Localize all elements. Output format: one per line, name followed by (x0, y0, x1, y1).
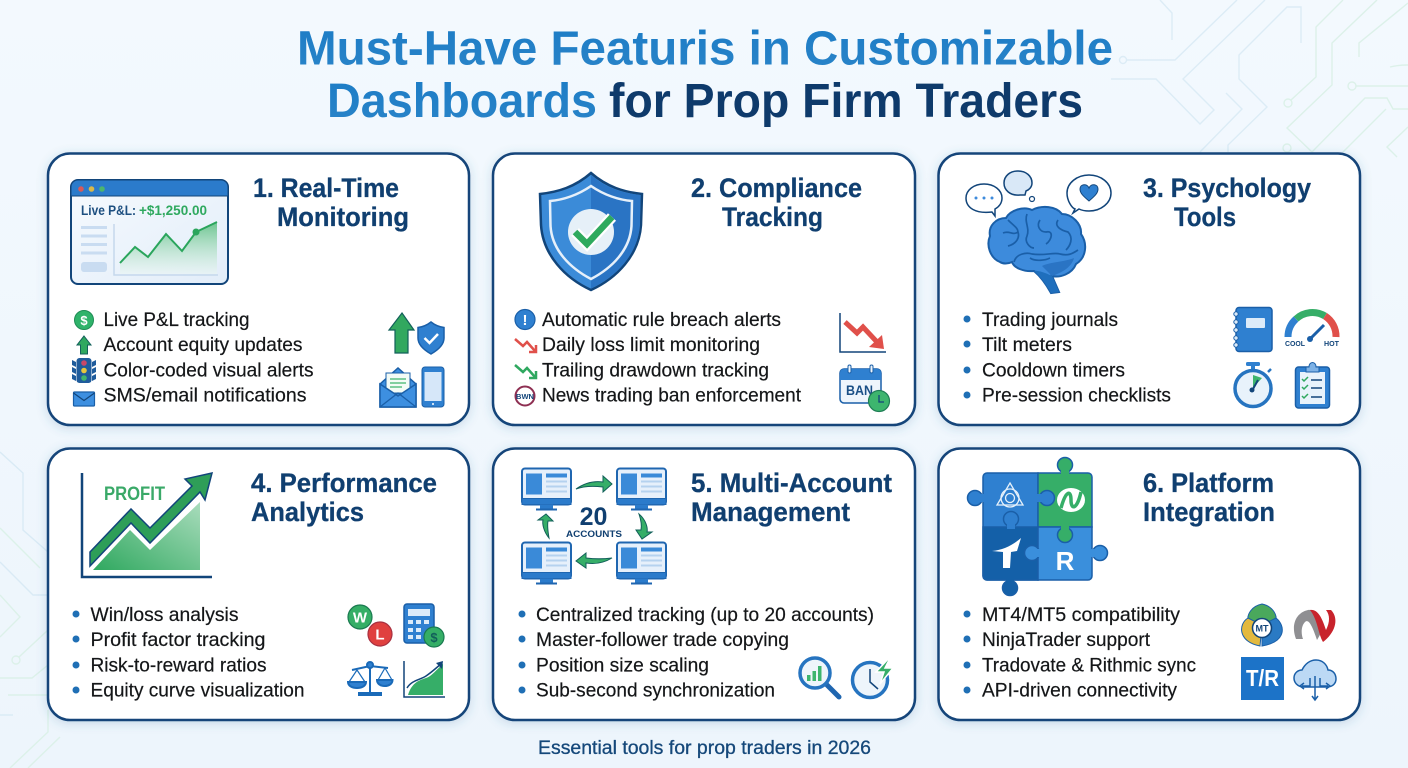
heading: performance analytics (251, 468, 437, 527)
icon: T/R badge (1241, 657, 1284, 700)
list: platform integrations: NinjaTrader support (982, 629, 1151, 651)
title: Must-Have Featuris in Customizable (297, 22, 1113, 76)
heading: psychology tools: Tools (1174, 202, 1236, 232)
icon: tilt meter: HOT (1324, 341, 1340, 348)
icon: balance scales (348, 662, 392, 694)
list: platform integrations: Tradovate & Rithmic sync (982, 654, 1196, 676)
icon: API cloud (1294, 660, 1336, 700)
icon: MetaTrader logo: MT (1256, 624, 1269, 634)
icon: ban calendar: BAN (846, 383, 873, 398)
circuit pattern bottom left (0, 452, 60, 768)
heading: platform integration (1143, 468, 1275, 527)
icon: mobile phone (422, 367, 444, 407)
icon: NinjaTrader logo (1294, 610, 1335, 642)
heading: compliance tracking (691, 173, 862, 232)
heading: performance analytics: 4. Performance (251, 468, 437, 498)
list: account management features: Centralized tracking (up to 20 accounts) (536, 604, 874, 626)
heading: psychology tools: 3. Psychology (1143, 173, 1311, 203)
icon: T/R badge: T/R (1246, 665, 1279, 691)
diagram: four synced monitors: 20 (580, 503, 607, 531)
icon: magnifier with bars (800, 658, 839, 697)
diagram: four synced monitors (522, 468, 666, 584)
list: compliance features: Automatic rule breach alerts (542, 309, 781, 331)
icon: news ban badge: BWN (516, 392, 534, 401)
list: platform integrations (964, 604, 1196, 702)
chart: profit growth: PROFIT (104, 483, 165, 505)
list: compliance features: Daily loss limit monitoring (542, 334, 760, 356)
heading: multi-account management: 5. Multi-Account (691, 468, 892, 498)
icon: alert circle (515, 310, 535, 330)
title (297, 22, 1113, 128)
list: monitoring features: SMS/email notifications (104, 384, 307, 406)
icon: brain with speech bubbles (966, 171, 1111, 293)
heading: real-time monitoring: Monitoring (277, 202, 409, 232)
icon: ban calendar (840, 365, 890, 412)
list: psychology tools: Pre-session checklists (982, 384, 1171, 406)
heading: platform integration: Integration (1143, 497, 1275, 527)
heading: performance analytics: Analytics (251, 497, 364, 527)
title: for Prop Firm Traders (609, 75, 1083, 128)
icon: red loss arrow (515, 339, 536, 352)
list: account management features: Master-follower trade copying (536, 629, 789, 651)
list: monitoring features: Color-coded visual alerts (104, 360, 314, 382)
icon: live P&L dashboard window (71, 180, 228, 284)
icon: win/loss badges: L (375, 626, 385, 644)
list: psychology tools: Cooldown timers (982, 360, 1125, 382)
panel: psychology tools (938, 154, 1360, 425)
heading: real-time monitoring (253, 173, 409, 232)
icon: equity curve (404, 661, 445, 697)
list: monitoring features: Live P&L tracking (104, 309, 250, 331)
icon: trading journal (1234, 308, 1272, 352)
icon: win/loss badges (348, 605, 392, 646)
icon: dollar coin (74, 310, 94, 330)
heading: real-time monitoring: 1. Real-Time (253, 173, 399, 203)
list: account management features: Position size scaling (536, 654, 709, 676)
list: compliance features: News trading ban enforcement (542, 384, 802, 406)
panel: compliance tracking (493, 154, 915, 425)
list: monitoring features: Account equity updates (104, 334, 303, 356)
icon: falling chart (840, 313, 886, 352)
panel: multi-account management (493, 448, 915, 720)
list: performance metrics: Risk-to-reward ratios (90, 654, 267, 676)
list: performance metrics (72, 604, 304, 702)
list: platform integrations: MT4/MT5 compatibility (982, 604, 1180, 626)
title: Dashboards (327, 75, 597, 128)
circuit pattern top right (1111, 0, 1408, 157)
icon: small envelope (74, 392, 94, 406)
icon: stopwatch (1235, 362, 1271, 406)
icon: dollar coin: $ (80, 313, 88, 328)
icon: win/loss badges: W (353, 610, 368, 626)
icon: platform puzzle (968, 458, 1108, 596)
diagram: four synced monitors: ACCOUNTS (566, 529, 622, 540)
icon: clock with lightning (852, 656, 893, 698)
list: account management features: Sub-second synchronization (536, 680, 775, 702)
icon: MetaTrader logo (1242, 604, 1282, 646)
panel: platform integration (938, 448, 1360, 720)
list: performance metrics: Profit factor tracking (90, 629, 266, 651)
chart: profit growth (82, 473, 212, 577)
icon: calculator with dollar (404, 604, 444, 647)
icon: live P&L dashboard window: +$1,250.00 (139, 203, 207, 218)
icon: tilt meter (1285, 312, 1340, 348)
heading: platform integration: 6. Platform (1143, 468, 1274, 498)
icon: tilt meter: COOL (1285, 341, 1306, 348)
icon: news ban badge (516, 386, 534, 406)
icon: live P&L dashboard window: Live P&L: (81, 203, 136, 218)
heading: multi-account management (691, 468, 892, 527)
icon: small up arrow (77, 336, 91, 354)
list: psychology tools: Tilt meters (982, 334, 1072, 356)
icon: alert circle: ! (522, 312, 528, 329)
list: performance metrics: Equity curve visualization (90, 680, 304, 702)
icon: shield with check (540, 173, 642, 290)
panel: real-time monitoring (48, 154, 469, 425)
list: compliance features: Trailing drawdown tracking (542, 360, 769, 382)
icon: traffic light (72, 358, 96, 383)
heading: multi-account management: Management (691, 497, 850, 527)
list: account management features (518, 604, 874, 702)
list: compliance features (542, 309, 802, 406)
icon: calculator with dollar: $ (430, 630, 438, 645)
panel: performance analytics (48, 448, 469, 720)
list: monitoring features (104, 309, 314, 406)
icon: green drawdown arrow (515, 365, 536, 378)
footer caption: Essential tools for prop traders in 2026 (538, 738, 871, 759)
list: psychology tools: Trading journals (982, 309, 1118, 331)
list: performance metrics: Win/loss analysis (90, 604, 239, 626)
list: psychology tools (964, 309, 1171, 406)
icon: large up arrow (389, 313, 414, 353)
heading: psychology tools (1143, 173, 1311, 232)
icon: platform puzzle: R (1056, 546, 1075, 576)
list: platform integrations: API-driven connectivity (982, 680, 1177, 702)
icon: small shield (418, 322, 444, 354)
icon: checklist clipboard (1296, 362, 1330, 408)
icon: envelope with letter (380, 368, 416, 407)
heading: compliance tracking: Tracking (722, 202, 823, 232)
heading: compliance tracking: 2. Compliance (691, 173, 862, 203)
